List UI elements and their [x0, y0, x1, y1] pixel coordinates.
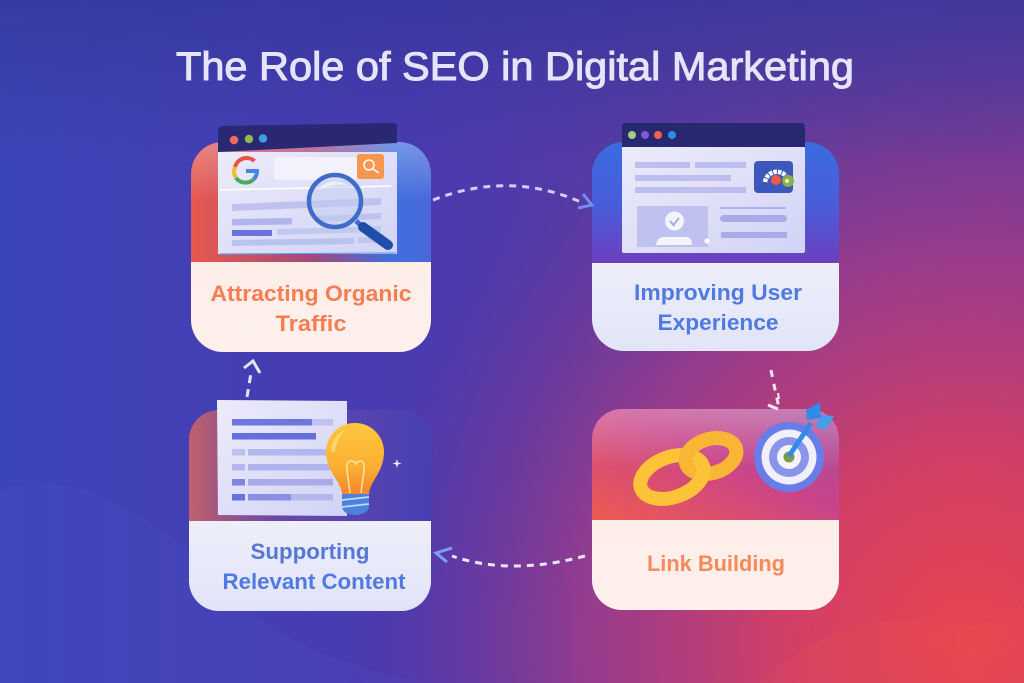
arrow: traffic to experience [433, 186, 592, 208]
icon: search results browser [218, 123, 397, 254]
icon: sparkle [392, 459, 402, 468]
panel: supporting relevant content [189, 400, 431, 611]
arrow: link building to content [436, 548, 585, 566]
panel: improving user experience: Experience [658, 310, 778, 335]
icon: target with dart [754, 393, 834, 492]
icon: magnifying glass [309, 175, 388, 245]
panel: attracting organic traffic [191, 123, 431, 352]
icon: light bulb [326, 423, 384, 515]
label: Improving User [634, 280, 802, 305]
icon: document [217, 400, 347, 516]
icon: chain links [634, 432, 741, 507]
panel: improving user experience [592, 123, 839, 351]
arrow: content to traffic [244, 361, 260, 397]
icon: website browser [622, 123, 805, 253]
panel: attracting organic traffic: Traffic [276, 311, 346, 336]
label: Link Building [647, 551, 785, 576]
arrow: experience to link building [768, 370, 779, 409]
label: Supporting [250, 539, 370, 564]
label: Attracting Organic [210, 281, 412, 306]
panel: link building [592, 393, 839, 610]
title: The Role of SEO in Digital Marketing [176, 45, 854, 89]
panel: supporting relevant content: Relevant Content [222, 569, 406, 594]
